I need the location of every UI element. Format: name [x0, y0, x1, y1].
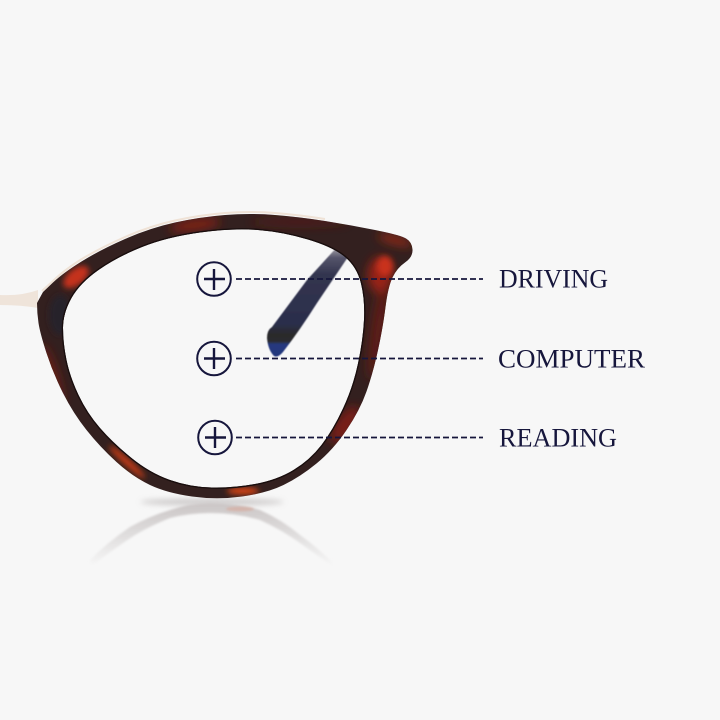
- dashed leader computer: [236, 358, 483, 360]
- glasses frame: tortoiseshell rim: [30, 205, 420, 505]
- label reading: READING: [499, 422, 617, 452]
- lens inner rim highlight: [310, 285, 366, 464]
- inner dark edge of rim: [63, 229, 364, 488]
- dashed leader reading: [236, 436, 483, 438]
- icon: plus circle computer: [197, 342, 231, 375]
- metal rim edge along top of frame: [42, 212, 325, 291]
- callout: reading: [198, 421, 617, 454]
- shadow under frame: [140, 498, 284, 506]
- callout: driving: [197, 262, 608, 296]
- label driving: DRIVING: [499, 264, 608, 294]
- callout: computer: [197, 342, 645, 375]
- dashed leader driving: [236, 278, 483, 280]
- reflection of frame: [90, 503, 335, 568]
- reflection red tint: [226, 506, 254, 512]
- label computer: COMPUTER: [498, 344, 645, 374]
- icon: plus circle reading: [198, 421, 232, 454]
- temple arm: far side: [0, 290, 38, 308]
- icon: plus circle driving: [197, 262, 231, 296]
- inner temple tip seen through lens: [267, 247, 348, 356]
